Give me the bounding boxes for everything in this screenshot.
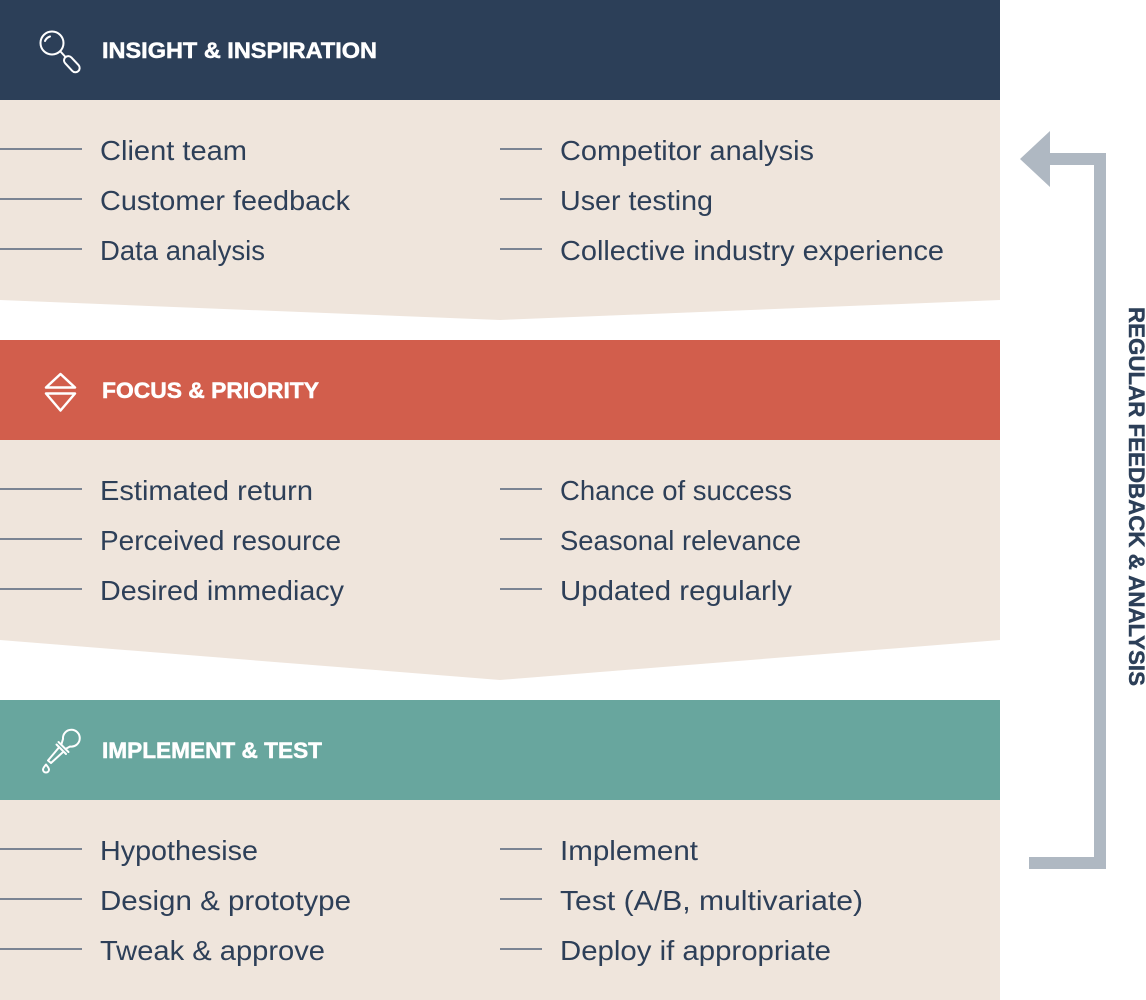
icon: magnifying glass bbox=[40, 32, 81, 74]
list: insight left column: Client team bbox=[100, 135, 247, 166]
panel: implement and test bbox=[0, 700, 1000, 1000]
list: focus left column bbox=[0, 475, 344, 606]
list: implement left column: Tweak & approve bbox=[100, 935, 325, 966]
panel: focus and priority bbox=[0, 340, 1000, 680]
panel: insight and inspiration bbox=[0, 0, 1000, 320]
icon: opposing triangles bbox=[46, 374, 75, 410]
body panel with downward point: focus bbox=[0, 440, 1000, 680]
heading: implement and test: IMPLEMENT & TEST bbox=[102, 738, 323, 763]
list: insight right column: Collective industry experience bbox=[560, 235, 944, 266]
header band: focus bbox=[0, 340, 1000, 440]
list: focus left column: Desired immediacy bbox=[100, 575, 344, 606]
list: focus right column: Chance of success bbox=[560, 475, 792, 506]
body panel with downward point: insight bbox=[0, 100, 1000, 320]
list: implement left column bbox=[0, 835, 351, 966]
list: implement left column: Design & prototype bbox=[100, 885, 351, 916]
list: insight right column bbox=[500, 135, 944, 266]
body panel: implement bbox=[0, 800, 1000, 1000]
list: implement right column bbox=[500, 835, 863, 966]
list: implement right column: Test (A/B, multivariate) bbox=[560, 885, 863, 916]
list: focus left column: Perceived resource bbox=[100, 525, 341, 556]
list: insight right column: User testing bbox=[560, 185, 713, 216]
list: implement right column: Implement bbox=[560, 835, 698, 866]
list: focus right column bbox=[500, 475, 801, 606]
list: insight left column bbox=[0, 135, 350, 266]
heading: focus and priority: FOCUS & PRIORITY bbox=[102, 378, 319, 403]
list: implement right column: Deploy if appropriate bbox=[560, 935, 831, 966]
icon: pipette bbox=[43, 730, 80, 772]
list: focus left column: Estimated return bbox=[100, 475, 313, 506]
list: insight left column: Customer feedback bbox=[100, 185, 350, 216]
list: implement left column: Hypothesise bbox=[100, 835, 258, 866]
header band: implement bbox=[0, 700, 1000, 800]
list: insight left column: Data analysis bbox=[100, 235, 265, 266]
list: focus right column: Updated regularly bbox=[560, 575, 792, 606]
heading: insight and inspiration: INSIGHT & INSPIRATION bbox=[102, 38, 377, 63]
list: insight right column: Competitor analysis bbox=[560, 135, 814, 166]
header band: insight bbox=[0, 0, 1000, 100]
arrow: feedback loop bbox=[1020, 131, 1106, 869]
list: focus right column: Seasonal relevance bbox=[560, 525, 801, 556]
